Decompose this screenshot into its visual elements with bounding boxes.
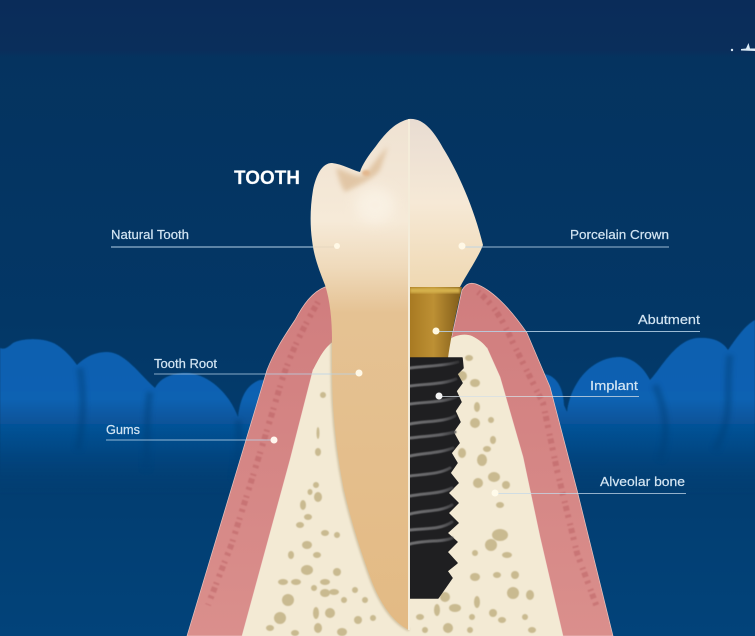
gums: right side [450,283,613,636]
label: Implant [436,378,639,400]
label: Abutment [432,312,700,334]
label: Alveolar bone [492,474,686,496]
label: Tooth Root: Tooth Root [154,356,217,371]
bone: left half with spongy holes [242,330,410,636]
porcelain crown: right half [409,119,483,287]
center divider line [408,119,410,630]
label: Implant: Implant [590,378,638,393]
label: Gums [106,422,278,444]
background: blurred blue teeth right [540,320,755,500]
label: Porcelain Crown: Porcelain Crown [570,227,669,242]
abutment: gold post [410,287,462,358]
title: TOOTH [234,168,300,189]
label: Abutment: Abutment [638,312,700,327]
label: Gums: Gums [106,422,140,437]
gums: left side [187,287,340,636]
label: Porcelain Crown [458,227,669,250]
label: Natural Tooth: Natural Tooth [111,227,189,242]
implant: threaded black screw [410,358,463,598]
occlusal shading [336,146,388,192]
background: blurred blue teeth left [0,339,270,500]
label: Natural Tooth [111,227,340,249]
label: Alveolar bone: Alveolar bone [600,474,685,489]
label: Tooth Root [154,356,362,376]
natural tooth: left half [311,119,409,630]
icon: small white mark top right [731,43,755,51]
bone: right half with spongy holes [410,335,563,636]
